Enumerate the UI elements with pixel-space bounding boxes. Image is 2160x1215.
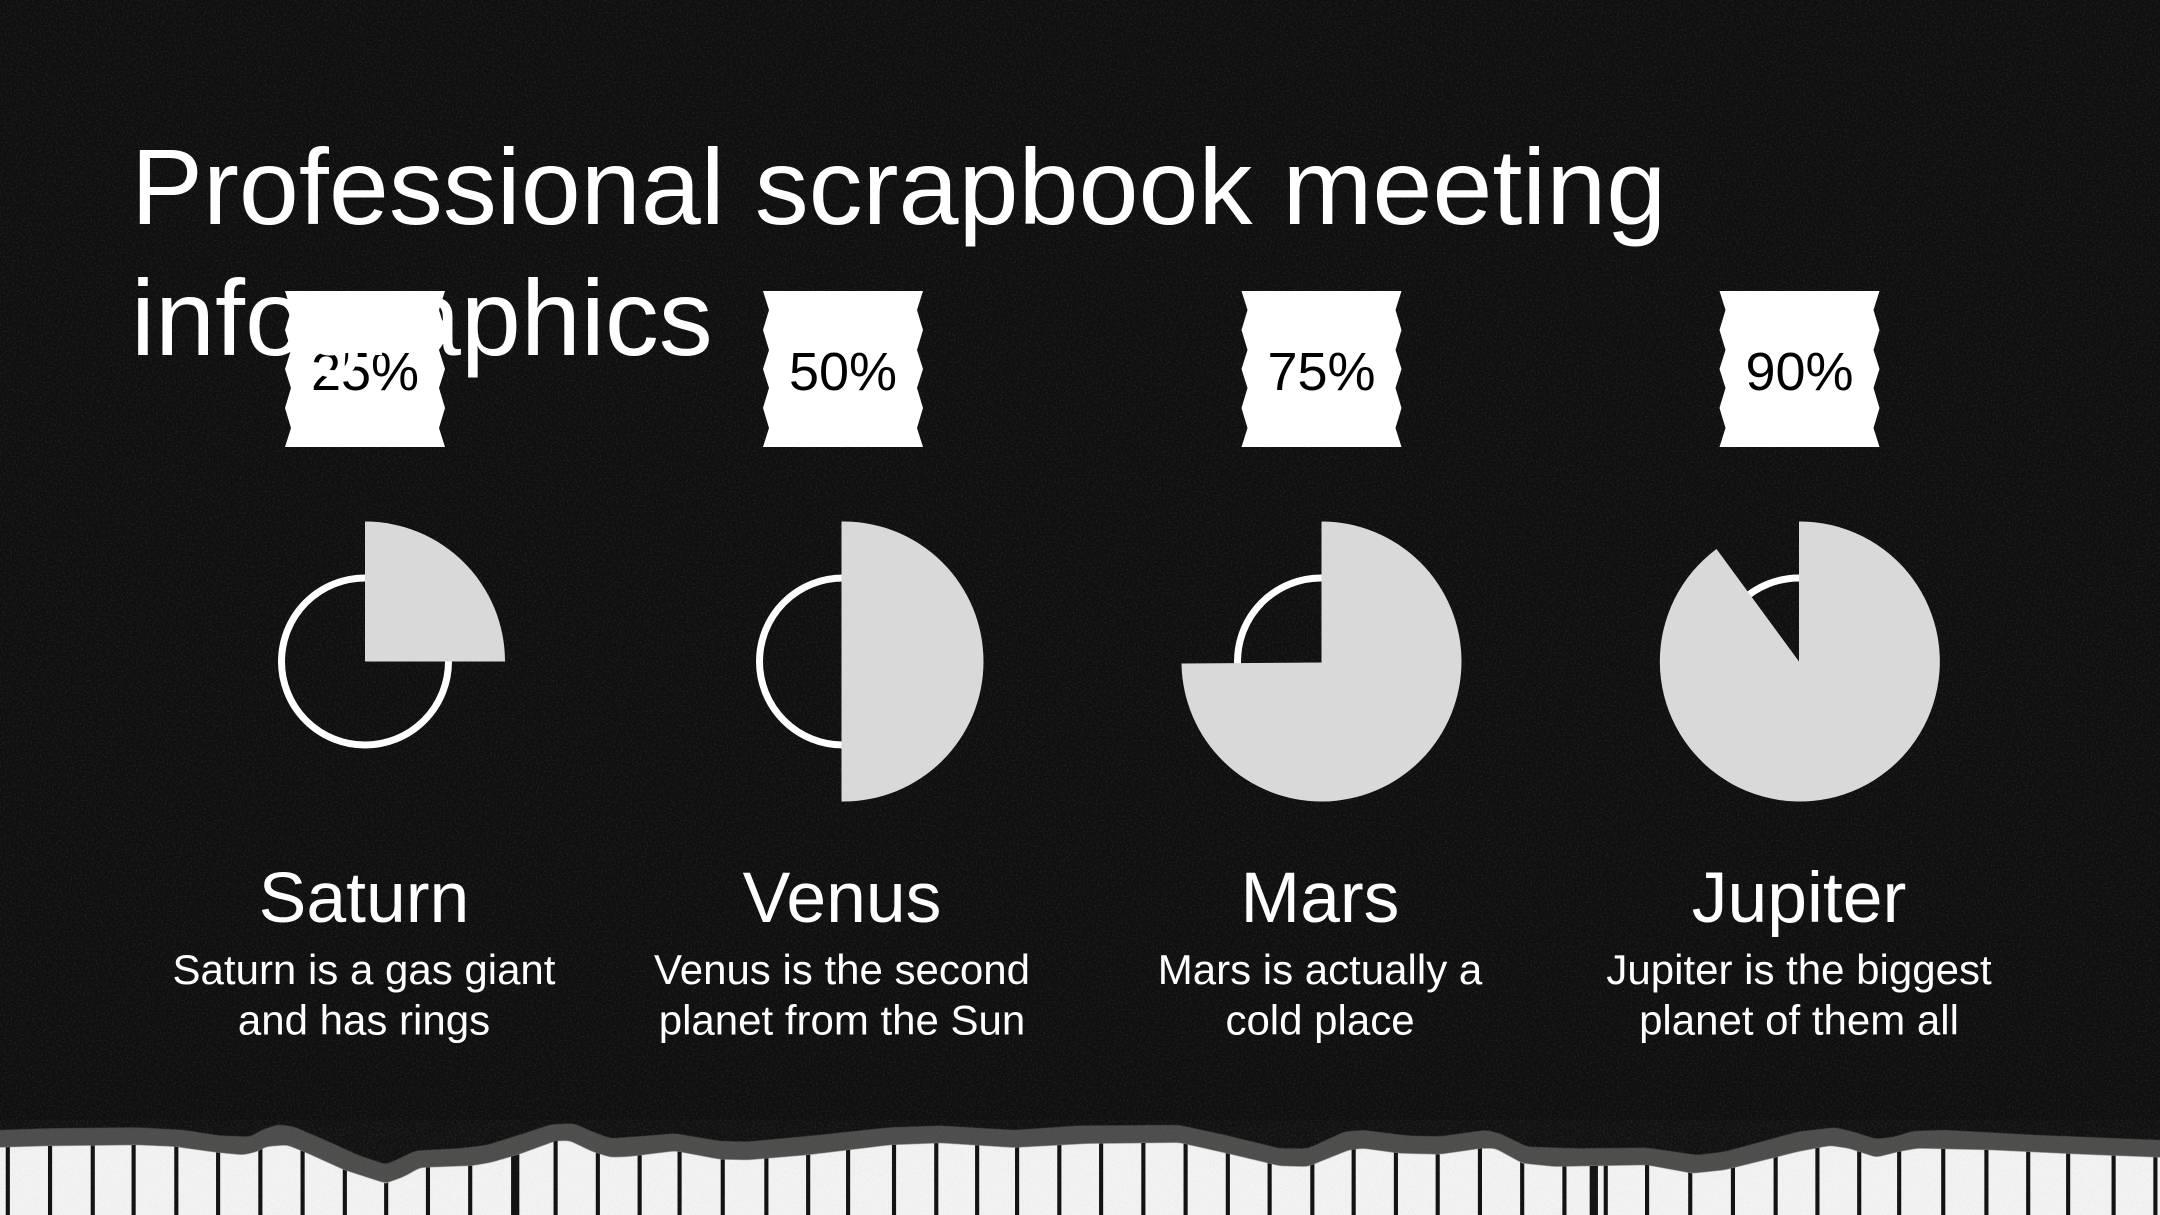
Saturn description: Saturn is a gas giant <box>173 946 556 993</box>
Jupiter description: planet of them all <box>1639 996 1959 1044</box>
pie chart: 50% <box>760 522 984 802</box>
percent tag: 90%: 90% <box>1745 342 1854 402</box>
pie chart: 90% <box>1660 521 1940 801</box>
column: Venus <box>654 291 1030 1044</box>
white lined paper <box>0 1141 2160 1215</box>
column: Mars <box>1158 291 1483 1044</box>
vertical paper stripes <box>6 1141 2158 1215</box>
torn paper strip at the bottom <box>0 1123 2160 1215</box>
percent tag: 75%: 75% <box>1267 342 1376 402</box>
paper grain over the strip <box>0 1120 2160 1215</box>
percent tag: 75% <box>1242 291 1402 447</box>
column: Jupiter <box>1606 291 1992 1044</box>
Mars description: cold place <box>1225 996 1415 1044</box>
percent tag: 90% <box>1720 291 1880 447</box>
pie chart: 75% <box>1182 522 1461 801</box>
Venus description: planet from the Sun <box>659 996 1025 1044</box>
Mars description: Mars is actually a <box>1158 946 1483 993</box>
column: Saturn <box>173 291 556 1044</box>
Venus description: Venus is the second <box>654 946 1030 993</box>
torn edge band <box>0 1123 2160 1215</box>
Jupiter description: Jupiter is the biggest <box>1606 946 1992 993</box>
Saturn description: and has rings <box>238 996 490 1044</box>
Mars heading: Mars <box>1241 858 1399 938</box>
title: Professional scrapbook meeting <box>131 126 1666 247</box>
percent tag: 50% <box>763 291 923 447</box>
Jupiter heading: Jupiter <box>1692 858 1906 938</box>
percent tag: 50%: 50% <box>789 342 897 402</box>
title: infographics <box>131 257 713 378</box>
Saturn heading: Saturn <box>259 858 469 938</box>
pie chart: 25% <box>282 522 505 745</box>
percent tag: 25% <box>285 291 445 447</box>
Venus heading: Venus <box>743 858 941 938</box>
percent tag: 25%: 25% <box>311 342 419 402</box>
